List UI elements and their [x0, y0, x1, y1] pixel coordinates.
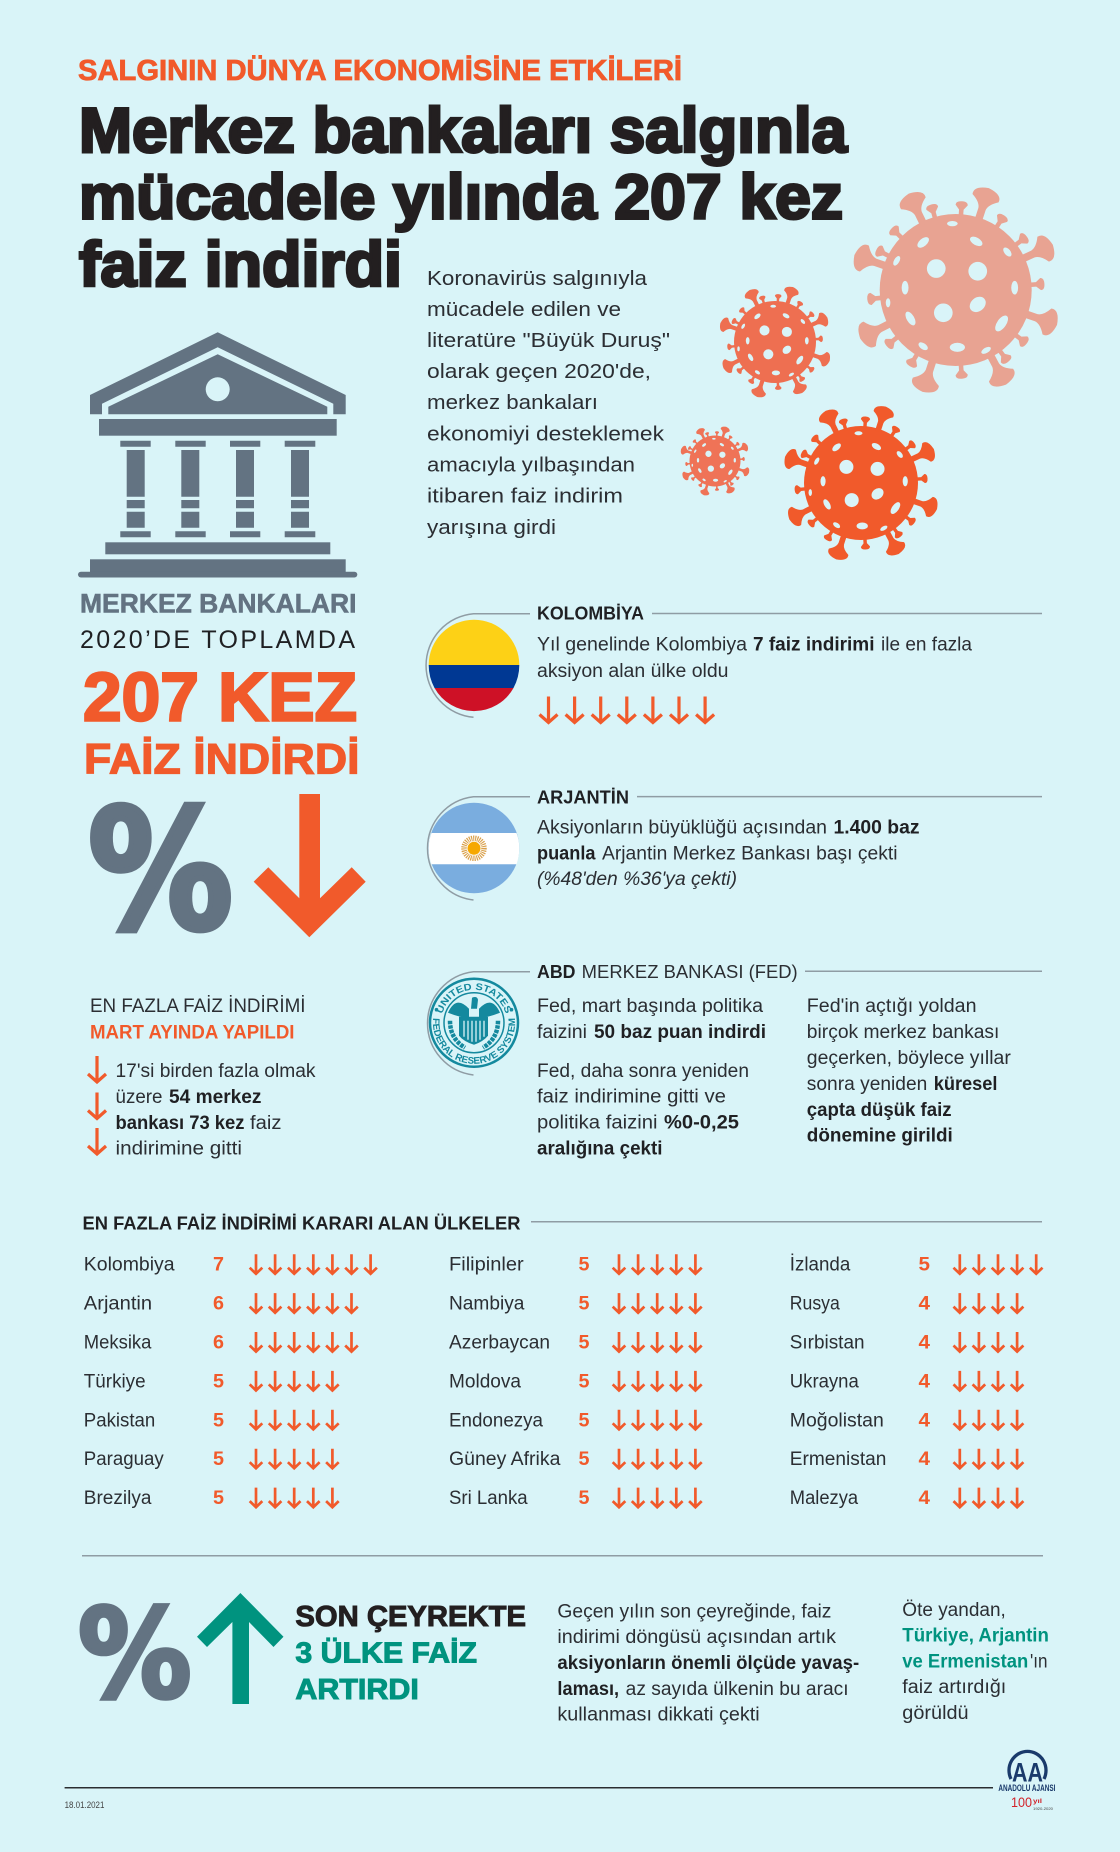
- body text: Arjantin Merkez Bankası başı çekti: [602, 843, 898, 864]
- logo: Anadolu Ajansı: AA: [1012, 1758, 1043, 1788]
- text block: mart ayında: [90, 996, 306, 1044]
- row: Moldova: [449, 1371, 702, 1392]
- text block: son çeyrek: az sayıda ülkenin bu aracı: [626, 1679, 849, 1700]
- row: Güney Afrika: [449, 1449, 702, 1470]
- body text column 2: çapta düşük faiz: [807, 1100, 952, 1121]
- logo: Anadolu Ajansı: ANADOLU AJANSI: [998, 1783, 1055, 1793]
- text block: son çeyrek: aksiyonların önemli ölçüde yavaş-: [557, 1653, 859, 1674]
- body text: puanla: [537, 843, 596, 864]
- flag: Argentina: [429, 803, 519, 893]
- row: Rusya: Rusya: [790, 1294, 840, 1315]
- heading: son çeyrekte: [295, 1601, 526, 1706]
- row: Filipinler: 5: [578, 1255, 590, 1276]
- text block: son çeyrek: kullanması dikkati çekti: [557, 1705, 760, 1726]
- row: Türkiye: 5: [213, 1371, 224, 1392]
- row: Filipinler: Filipinler: [449, 1255, 524, 1276]
- intro paragraph: itibaren faiz indirim: [427, 486, 623, 508]
- intro paragraph: mücadele edilen ve: [427, 299, 621, 321]
- body text: Yıl genelinde Kolombiya: [537, 635, 747, 656]
- heading: merkez bankaları total: [80, 588, 360, 784]
- heading: KOLOMBİYA: [537, 604, 644, 624]
- text block: son çeyrek: laması,: [557, 1679, 619, 1700]
- seal: Federal Reserve System: UNITED STATES: [437, 983, 511, 1013]
- row: Moğolistan: 4: [918, 1410, 930, 1431]
- body text column 2: sonra yeniden: [807, 1074, 927, 1095]
- body text: aksiyon alan ülke oldu: [537, 661, 728, 682]
- row: Malezya: 4: [918, 1488, 930, 1509]
- body text column 2: geçerken, böylece yıllar: [807, 1048, 1011, 1069]
- row: Moldova: 5: [578, 1371, 590, 1392]
- text block: faiz artıran ülkeler: Türkiye, Arjantin: [902, 1626, 1049, 1647]
- row: Sırbistan: Sırbistan: [790, 1332, 864, 1354]
- seal: Federal Reserve System: FEDERAL RESERVE SYSTEM: [432, 1018, 516, 1064]
- row: Ermenistan: [790, 1449, 1023, 1470]
- row: Endonezya: [449, 1410, 702, 1431]
- text block: faiz artıran ülkeler: [902, 1600, 1049, 1724]
- row: İzlanda: 5: [918, 1255, 930, 1276]
- row: Endonezya: 5: [578, 1410, 590, 1431]
- row: Sırbistan: [790, 1332, 1023, 1354]
- row: Azerbaycan: [449, 1332, 702, 1354]
- text block: 54 merkez bankası: faiz: [250, 1113, 282, 1134]
- body text column 1: aralığına çekti: [537, 1138, 662, 1159]
- row: Moldova: Moldova: [449, 1371, 521, 1392]
- body text: ile en fazla: [881, 635, 972, 656]
- row: Sri Lanka: [449, 1488, 702, 1509]
- kicker heading: SALGININ DÜNYA EKONOMİSİNE ETKİLERİ: [78, 54, 682, 87]
- body text column 1: faiz indirimine gitti ve: [537, 1087, 726, 1108]
- heading: son çeyrekte: SON ÇEYREKTE: [295, 1601, 526, 1633]
- seal: Federal Reserve System: [428, 978, 520, 1068]
- row: Meksika: 6: [213, 1332, 224, 1354]
- row: Azerbaycan: Azerbaycan: [449, 1332, 550, 1354]
- row: Kolombiya: Kolombiya: [84, 1255, 175, 1276]
- row: Ukrayna: [790, 1371, 1023, 1392]
- row: Nambiya: [449, 1293, 702, 1315]
- intro paragraph: olarak geçen 2020'de,: [427, 361, 651, 383]
- text block: 54 merkez bankası: 54 merkez: [169, 1087, 262, 1108]
- row: Rusya: [790, 1293, 1023, 1315]
- body text column 1: %0-0,25: [664, 1113, 739, 1134]
- row: Kolombiya: [84, 1254, 377, 1276]
- table: country rate-cut counts: [84, 1254, 1043, 1509]
- text block: mart ayında: EN FAZLA FAİZ İNDİRİMİ: [90, 996, 306, 1017]
- heading: son çeyrekte: ARTIRDI: [295, 1674, 419, 1706]
- heading: son çeyrekte: 3 ÜLKE FAİZ: [295, 1637, 477, 1670]
- heading: en fazla faiz indirimi ülkeler: EN FAZLA FAİZ İNDİRİMİ KARARI ALAN ÜLKELER: [82, 1212, 520, 1233]
- logo: Anadolu Ajansı: yıl: [1033, 1799, 1042, 1805]
- row: Ukrayna: 4: [918, 1371, 930, 1392]
- row: Meksika: [84, 1332, 358, 1354]
- intro paragraph: amacıyla yılbaşından: [427, 454, 635, 476]
- text block: 54 merkez bankası: üzere: [116, 1087, 162, 1108]
- text block: son çeyrek: [557, 1601, 859, 1726]
- row: Ermenistan: Ermenistan: [790, 1449, 886, 1470]
- row: Ukrayna: Ukrayna: [790, 1371, 859, 1392]
- row: Güney Afrika: Güney Afrika: [449, 1449, 561, 1470]
- row: Paraguay: Paraguay: [84, 1449, 164, 1470]
- logo: Anadolu Ajansı: 1920-2020: [1033, 1806, 1054, 1811]
- body text: [537, 818, 920, 890]
- row: Pakistan: Pakistan: [84, 1410, 155, 1431]
- row: Malezya: [790, 1488, 1023, 1509]
- row: Paraguay: [84, 1449, 339, 1470]
- title: mücadele yılında 207 kez: [79, 162, 843, 232]
- body text column 2: küresel: [934, 1074, 998, 1095]
- icon: virus red: [782, 403, 940, 563]
- row: Kolombiya: 7: [213, 1255, 224, 1276]
- body text column 1: Fed, mart başında politika: [537, 996, 763, 1017]
- intro paragraph: yarışına girdi: [427, 517, 556, 539]
- icon: virus large pale: [850, 184, 1062, 396]
- row: Paraguay: 5: [213, 1449, 224, 1470]
- title: [79, 96, 848, 300]
- body text column 2: [807, 996, 1011, 1147]
- icon: big percent: %: [88, 775, 233, 968]
- text block: 54 merkez bankası: bankası 73 kez: [116, 1113, 244, 1134]
- body text column 2: Fed'in açtığı yoldan: [807, 996, 976, 1017]
- heading: MERKEZ BANKASI (FED): [582, 962, 798, 982]
- row: Pakistan: [84, 1410, 339, 1431]
- arrow: big down: [254, 794, 366, 937]
- body text column 1: Fed, daha sonra yeniden: [537, 1061, 749, 1082]
- row: Meksika: Meksika: [84, 1332, 152, 1354]
- icon: virus medium: [718, 285, 832, 399]
- intro paragraph: Koronavirüs salgınıyla: [427, 268, 648, 290]
- row: Endonezya: Endonezya: [449, 1410, 543, 1431]
- decorative arc with header rule: [426, 614, 530, 717]
- decorative arc with header rule: [428, 972, 530, 1075]
- row: Arjantin: 6: [213, 1294, 224, 1315]
- text block: faiz artıran ülkeler: Öte yandan,: [902, 1600, 1006, 1621]
- row: Filipinler: [449, 1254, 702, 1276]
- body text: [537, 635, 972, 682]
- heading: merkez bankaları total: MERKEZ BANKALARI: [80, 588, 356, 618]
- row: Moğolistan: [790, 1410, 1023, 1431]
- title: Merkez bankaları salgınla: [79, 96, 848, 166]
- row: Güney Afrika: 5: [578, 1449, 590, 1470]
- text block: son çeyrek: indirimi döngüsü açısından artık: [557, 1627, 837, 1648]
- row: Nambiya: Nambiya: [449, 1294, 525, 1315]
- body text: 7 faiz indirimi: [753, 635, 874, 656]
- panel: Arjantin: [428, 787, 1042, 900]
- row: Brezilya: 5: [213, 1488, 224, 1509]
- body text column 1: [537, 996, 766, 1159]
- decorative arc with header rule: [428, 797, 530, 900]
- body text column 2: dönemine girildi: [807, 1126, 953, 1147]
- row: İzlanda: [790, 1254, 1042, 1276]
- icon: three down arrows: [88, 1056, 106, 1154]
- row: Rusya: 4: [918, 1294, 930, 1315]
- row: Brezilya: [84, 1488, 339, 1509]
- text block: son çeyrek: Geçen yılın son çeyreğinde, faiz: [557, 1601, 831, 1622]
- row: Ermenistan: 4: [918, 1449, 930, 1470]
- icon: central bank building: [78, 332, 357, 578]
- text block: 54 merkez bankası: 17'si birden fazla olmak: [116, 1061, 316, 1082]
- row: Nambiya: 5: [578, 1294, 590, 1315]
- heading: ABD: [537, 962, 576, 982]
- icon: small percent: %: [78, 1584, 192, 1727]
- text block: faiz artıran ülkeler: görüldü: [902, 1703, 969, 1724]
- arrow: up teal: [197, 1593, 284, 1704]
- row: İzlanda: İzlanda: [790, 1255, 851, 1276]
- body text column 1: faizini: [537, 1022, 587, 1043]
- row: Sırbistan: 4: [918, 1332, 930, 1354]
- body text: Aksiyonların büyüklüğü açısından: [537, 818, 827, 839]
- text block: 54 merkez bankası: indirimine gitti: [116, 1138, 242, 1160]
- logo: Anadolu Ajansı: 100: [1011, 1794, 1032, 1810]
- row: Arjantin: [84, 1293, 358, 1315]
- text block: faiz artıran ülkeler: 'ın: [1030, 1651, 1048, 1672]
- row: Sri Lanka: 5: [578, 1488, 590, 1509]
- row: Pakistan: 5: [213, 1410, 224, 1431]
- body text column 1: 50 baz puan indirdi: [594, 1022, 766, 1043]
- row: Arjantin: Arjantin: [84, 1294, 152, 1315]
- logo: Anadolu Ajansı: [998, 1751, 1055, 1811]
- body text: 1.400 baz: [834, 818, 920, 839]
- date: 18.01.2021: [65, 1800, 104, 1810]
- row: Sri Lanka: Sri Lanka: [449, 1488, 528, 1509]
- flag: Colombia: [429, 620, 519, 711]
- row: Türkiye: [84, 1371, 339, 1392]
- seven down arrows: [540, 696, 714, 722]
- text block: 54 merkez bankası: [116, 1061, 316, 1160]
- text block: faiz artıran ülkeler: faiz artırdığı: [902, 1677, 1006, 1698]
- row: Türkiye: Türkiye: [84, 1371, 146, 1392]
- heading: merkez bankaları total: 2020’DE TOPLAMDA: [80, 626, 355, 654]
- text block: mart ayında: MART AYINDA YAPILDI: [90, 1022, 294, 1044]
- intro paragraph: [427, 268, 670, 539]
- body text column 1: politika faizini: [537, 1113, 658, 1134]
- intro paragraph: literatüre "Büyük Duruş": [427, 330, 670, 352]
- row: Malezya: Malezya: [790, 1488, 859, 1509]
- intro paragraph: merkez bankaları: [427, 392, 598, 414]
- body text: (%48'den %36'ya çekti): [537, 869, 737, 890]
- row: Moğolistan: Moğolistan: [790, 1410, 884, 1431]
- panel: Kolombiya: [426, 604, 1042, 722]
- text block: faiz artıran ülkeler: ve Ermenistan: [902, 1651, 1028, 1672]
- panel: ABD Merkez Bankası: [426, 962, 1042, 1159]
- body text column 2: birçok merkez bankası: [807, 1022, 999, 1043]
- row: Brezilya: Brezilya: [84, 1488, 152, 1509]
- heading: merkez bankaları total: 207 KEZ: [83, 658, 357, 736]
- title: faiz indirdi: [79, 230, 402, 300]
- intro paragraph: ekonomiyi desteklemek: [427, 424, 665, 446]
- row: Azerbaycan: 5: [578, 1332, 590, 1354]
- heading: ARJANTİN: [537, 787, 629, 807]
- heading: merkez bankaları total: FAİZ İNDİRDİ: [84, 736, 360, 784]
- icon: virus small: [679, 425, 751, 497]
